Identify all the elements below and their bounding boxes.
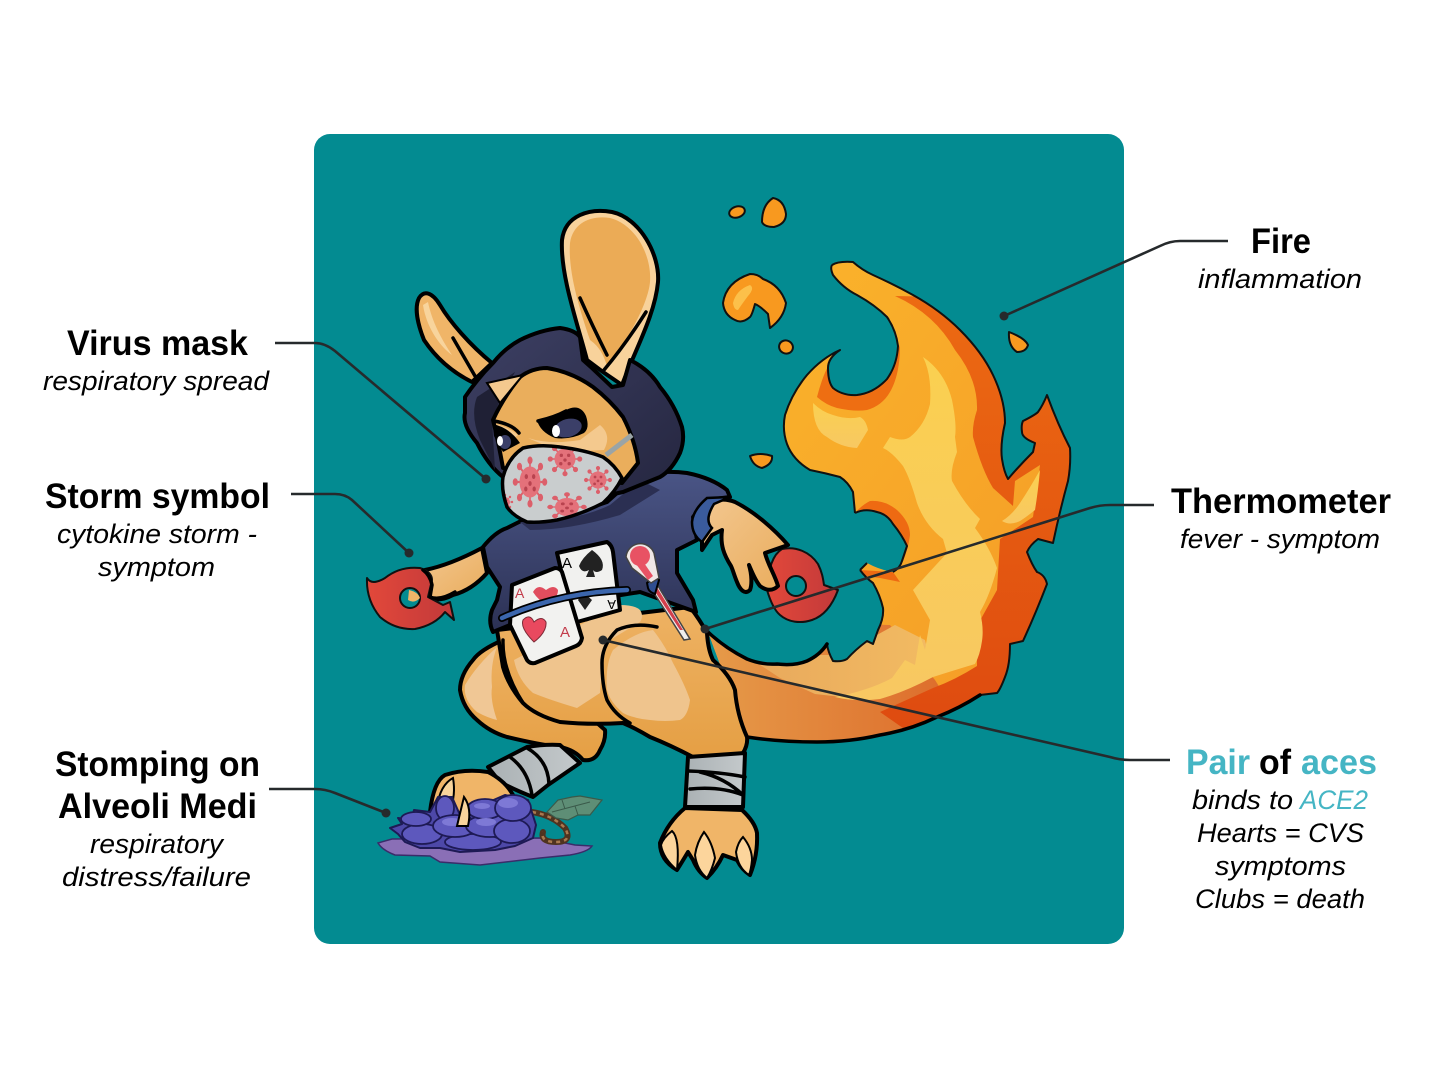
ankle bandage right: [685, 753, 745, 807]
leader: pair of aces: [598, 636, 1170, 760]
label: storm symbol: Storm symbol: [45, 477, 270, 516]
label: pair of aces: of: [1259, 743, 1291, 782]
label: stomping on alveoli medi: distress/failure: [62, 862, 251, 892]
icon: fire tail: [708, 260, 1072, 744]
leader: storm symbol: [291, 494, 414, 558]
icon: ace of spades card: A: [607, 597, 616, 612]
label: fire: [1198, 222, 1362, 294]
leader: thermometer: [700, 505, 1154, 634]
icon: alveoli grapes on puddle: [378, 795, 602, 865]
label: thermometer: Thermometer: [1171, 482, 1391, 521]
icon: ace of hearts card: A: [560, 624, 570, 641]
infographic canvas: [44, 134, 1390, 944]
label: thermometer: fever - symptom: [1180, 524, 1380, 554]
label: thermometer: [1171, 482, 1391, 554]
leader: virus mask: [275, 343, 490, 484]
label: pair of aces: symptoms: [1215, 851, 1346, 881]
teal panel: [314, 134, 1124, 944]
left foot toes over grapes: [457, 797, 469, 826]
leader lines and dots: [269, 241, 1228, 818]
virus mask: [497, 443, 622, 522]
label: virus mask: respiratory spread: [43, 366, 270, 396]
label: pair of aces: Clubs = death: [1195, 884, 1365, 914]
label: fire: inflammation: [1198, 264, 1362, 294]
left hand fingers: [423, 570, 455, 598]
leader: alveoli: [269, 789, 390, 818]
icon: ace of hearts card: A: [515, 585, 525, 601]
label: pair of aces: binds to: [1192, 785, 1293, 815]
ankle bandage left: [488, 745, 580, 797]
label: pair of aces: ACE2: [1298, 785, 1368, 815]
label: storm symbol: symptom: [98, 552, 215, 582]
right foot with claws: [660, 808, 757, 878]
icon: storm symbol right (behind hand): [767, 548, 838, 622]
label: stomping on alveoli medi: respiratory: [90, 829, 225, 859]
label: stomping on alveoli medi: Alveoli Medi: [58, 787, 257, 826]
label: fire: Fire: [1251, 222, 1311, 261]
label: pair of aces: Pair: [1186, 743, 1250, 782]
icon: floating embers: [723, 198, 1028, 468]
label: storm symbol: cytokine storm -: [57, 519, 257, 549]
kangaroo left leg: [460, 640, 605, 760]
belt: [502, 590, 627, 618]
label: storm symbol: [45, 477, 270, 582]
left arm: [421, 548, 487, 599]
label: stomping on alveoli medi: [55, 745, 260, 892]
face: [487, 368, 638, 483]
icon: ace of hearts card: [510, 568, 582, 663]
hood: [464, 328, 683, 510]
leader: fire: [1000, 241, 1228, 320]
icon: ace of spades card: A: [562, 555, 572, 572]
right ear: [562, 211, 658, 385]
label: pair of aces: aces: [1301, 743, 1377, 782]
label: stomping on alveoli medi: Stomping on: [55, 745, 260, 784]
left ear: [417, 293, 492, 382]
kangaroo hips and right thigh: [497, 605, 747, 758]
label: pair of aces: [1186, 743, 1377, 914]
hooded shirt: [483, 472, 730, 632]
label: virus mask: [43, 324, 270, 396]
label: pair of aces: Hearts = CVS: [1197, 818, 1364, 848]
left foot: [430, 771, 513, 823]
icon: storm symbol left: [367, 568, 454, 629]
icon: thermometer: [626, 544, 690, 640]
label: virus mask: Virus mask: [67, 324, 249, 363]
icon: ace of spades card: [557, 542, 620, 622]
right arm and hand: [702, 500, 788, 592]
